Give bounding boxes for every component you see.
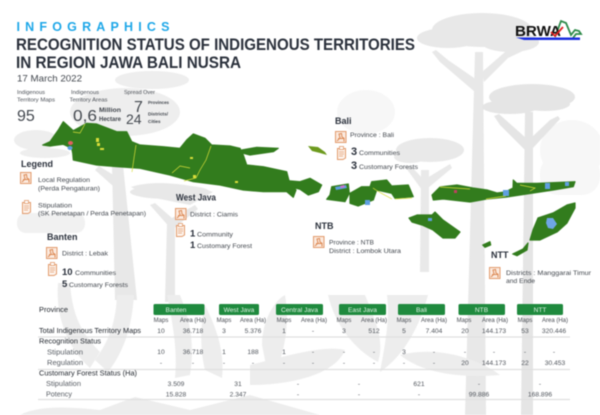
row: total maps: 3: [342, 328, 346, 335]
province names: NTB: [475, 307, 489, 314]
stat: spread: Cities: [148, 119, 161, 124]
legend: (Perda Pengaturan): [38, 186, 100, 192]
column headers: Maps: [217, 318, 231, 324]
top right tree: [417, 13, 539, 415]
row: total maps: 5: [402, 328, 406, 335]
row: recognition regulation: -: [160, 360, 162, 367]
title: [16, 36, 415, 72]
row labels: Regulation: [47, 360, 83, 367]
column headers: Maps: [397, 318, 411, 324]
stat: territory maps: [17, 90, 55, 125]
callout: NTT: [490, 250, 592, 285]
Bali island: [288, 178, 322, 195]
row labels: [39, 307, 142, 398]
row: forest stipulation: -: [297, 381, 299, 388]
row: forest stipulation: -: [478, 381, 480, 388]
callout: Banten: [46, 232, 129, 290]
callout: NTB: District : Lombok Utara: [329, 248, 401, 255]
stat: spread: 24: [126, 111, 142, 127]
legend: (SK Penetapan / Perda Penetapan): [38, 210, 146, 218]
callout: Bali: 3: [351, 160, 357, 172]
row labels: Potency: [46, 392, 73, 398]
icon: local regulation: [20, 172, 31, 184]
row labels: Recognition Status: [39, 338, 102, 346]
Lombok island: [327, 184, 349, 202]
callout: NTB: Province : NTB: [329, 240, 374, 246]
province names: Bali: [416, 307, 428, 314]
row: forest stipulation: -: [358, 381, 360, 388]
row: forest stipulation: 621: [413, 381, 425, 388]
row: forest potency: 168.896: [528, 392, 552, 398]
row: recognition stipulation: [157, 349, 555, 356]
row: recognition stipulation: -: [433, 349, 435, 356]
callout: Bali: Communities: [359, 150, 401, 157]
column headers: Maps: [154, 318, 168, 324]
stat: territory areas: 0,6: [73, 108, 97, 125]
Java island: [43, 122, 296, 197]
callout: West Java: Community: [197, 232, 234, 238]
stat: spread: 7: [134, 99, 143, 116]
row: total maps: 320.446: [542, 328, 566, 335]
row: recognition regulation: -: [192, 360, 194, 367]
stat: territory areas: Indigenous: [71, 90, 99, 96]
callout: NTT: Districts : Manggarai Timur: [506, 270, 592, 277]
stat: territory areas: [70, 90, 122, 125]
row: recognition stipulation: -: [373, 349, 375, 356]
legend tree crown: [17, 213, 85, 233]
bottom leaves: [20, 283, 500, 415]
column headers: Area (Ha): [240, 318, 266, 324]
callout: Banten: Customary Forests: [69, 282, 129, 289]
stat: territory areas: Territory Areas: [70, 98, 108, 104]
row: forest potency: -: [297, 392, 299, 398]
row: total maps: 36.718: [183, 328, 204, 335]
column headers: Area (Ha): [361, 318, 387, 324]
row: forest stipulation: 3.509: [168, 381, 185, 388]
stat: territory maps: 95: [17, 108, 35, 125]
province names: Central Java: [281, 307, 318, 314]
logo: BRWA: BRWA: [515, 24, 562, 40]
logo: BRWA: [515, 21, 581, 40]
row: recognition regulation: -: [343, 360, 345, 367]
row: recognition stipulation: -: [493, 349, 495, 356]
province names: Banten: [166, 307, 187, 314]
row: recognition stipulation: 1: [222, 349, 226, 356]
callout: Bali: [335, 116, 419, 172]
column headers: Area (Ha): [482, 318, 508, 324]
callout: NTB: NTB: [315, 221, 334, 231]
Sumba island: [409, 212, 460, 238]
callout: West Java: [176, 192, 252, 251]
callout: Banten: District : Lebak: [62, 250, 109, 258]
column headers: Area (Ha): [542, 318, 568, 324]
date: 17 March 2022: [17, 74, 82, 84]
faint clouds: [337, 90, 600, 195]
stat: spread: [124, 90, 169, 127]
row labels: Customary Forest Status (Ha): [39, 370, 137, 378]
row: recognition regulation: -: [252, 360, 254, 367]
legend: Local Regulation: [38, 177, 90, 184]
row: recognition stipulation: 10: [157, 349, 165, 356]
row: recognition regulation: 144.173: [482, 360, 506, 367]
row: recognition regulation: -: [312, 360, 314, 367]
province names: West Java: [224, 307, 255, 314]
row: forest potency: 15.828: [166, 392, 187, 398]
province names: East Java: [348, 307, 377, 314]
row separators: [38, 337, 570, 400]
row: total maps: 1: [282, 328, 286, 335]
row: total maps: 5.376: [245, 328, 262, 335]
table: recognition status by province: [38, 304, 570, 400]
row: recognition regulation: -: [403, 360, 405, 367]
row: recognition stipulation: -: [524, 349, 526, 356]
map: Java Bali Nusa Tenggara: [43, 122, 575, 256]
Timor island: [530, 203, 575, 240]
heading: INFOGRAPHICS: INFOGRAPHICS: [16, 20, 170, 34]
row: recognition stipulation: 188: [247, 349, 259, 356]
callout: NTT: NTT: [491, 250, 509, 260]
province names: [166, 307, 546, 314]
row: recognition regulation: [160, 360, 566, 367]
callout: West Java: 1: [190, 228, 196, 240]
province names: NTT: [534, 307, 546, 314]
callout: West Java: 1: [190, 240, 196, 251]
row labels: Province: [39, 307, 68, 314]
row: recognition stipulation: -: [553, 349, 555, 356]
column headers: [154, 318, 568, 324]
callout: West Java: District : Ciamis: [190, 212, 239, 218]
Flores island: [432, 180, 575, 202]
row: total maps: 7.404: [426, 328, 443, 335]
second right tree: [482, 84, 575, 415]
West Java tree: [130, 183, 213, 302]
row: forest potency: [166, 392, 552, 398]
row: recognition regulation: 22: [521, 360, 529, 367]
row: total maps: 53: [521, 328, 529, 335]
row: forest potency: -: [418, 392, 420, 398]
callout: Bali: Customary Forests: [359, 164, 419, 171]
Madura island: [242, 147, 278, 155]
callout: West Java: Customary Forest: [197, 243, 252, 250]
third tree: [394, 138, 464, 272]
row labels: Stipulation: [47, 350, 83, 356]
icon: stipulation: [22, 200, 30, 214]
row: recognition stipulation: -: [312, 349, 314, 356]
Sumbawa island: [350, 180, 413, 206]
row: recognition regulation: -: [283, 360, 285, 367]
callout: Bali: 3: [351, 146, 357, 158]
province pills: [154, 304, 563, 315]
row: recognition stipulation: 1: [282, 349, 286, 356]
title: IN REGION JAWA BALI NUSRA: [16, 54, 241, 72]
row: forest stipulation: [168, 381, 541, 388]
row: recognition regulation: -: [373, 360, 375, 367]
row: forest potency: -: [358, 392, 360, 398]
callout: Banten: Communities: [75, 270, 117, 277]
row: total maps: 10: [157, 328, 165, 335]
column headers: Maps: [518, 318, 532, 324]
callout: Banten: 10: [62, 267, 73, 278]
row: total maps: 144.173: [482, 328, 506, 335]
column headers: Area (Ha): [180, 318, 206, 324]
row: forest potency: 99.886: [469, 392, 490, 398]
callout: Bali: Bali: [335, 116, 352, 126]
column headers: Maps: [457, 318, 471, 324]
row: recognition regulation: -: [433, 360, 435, 367]
column headers: Maps: [337, 318, 351, 324]
legend: [20, 159, 146, 218]
legend: Stipulation: [38, 202, 72, 210]
row: total maps: 3: [222, 328, 226, 335]
stat: territory areas: Million: [99, 108, 121, 114]
callout: Banten: 5: [62, 279, 68, 290]
row: recognition stipulation: 3: [402, 349, 406, 356]
row: recognition stipulation: -: [464, 349, 466, 356]
left tree crown and trunk: [14, 71, 189, 158]
row: total maps: 20: [461, 328, 469, 335]
callout: NTB: [314, 221, 401, 255]
stat: spread: Districts/: [148, 112, 169, 116]
column headers: Area (Ha): [421, 318, 447, 324]
provincial borders and highlights: [73, 124, 211, 181]
column headers: Maps: [277, 318, 291, 324]
row: recognition regulation: -: [223, 360, 225, 367]
title: RECOGNITION STATUS OF INDIGENOUS TERRITORIES: [16, 36, 415, 54]
callout: Banten: Banten: [47, 232, 78, 242]
stat: territory maps: Territory Maps: [17, 98, 55, 104]
stat: spread: Spread Over: [124, 90, 155, 96]
callout: NTT: and Ende: [506, 278, 535, 285]
callout: Bali: Province : Bali: [350, 132, 394, 139]
row: recognition regulation: 20: [461, 360, 469, 367]
row: forest stipulation: -: [539, 381, 541, 388]
row: recognition stipulation: -: [343, 349, 345, 356]
row labels: Total Indigenous Territory Maps: [39, 328, 142, 335]
row labels: Stipulation: [46, 381, 81, 388]
column headers: Area (Ha): [301, 318, 327, 324]
callout: West Java: West Java: [176, 192, 217, 202]
stat: territory areas: Hectare: [99, 117, 122, 123]
Nusa Penida islet: [308, 146, 327, 155]
row: forest potency: 2.347: [230, 392, 247, 398]
stat: territory maps: Indigenous: [17, 90, 45, 96]
stat: spread: Provinces: [148, 100, 169, 105]
row: forest stipulation: 31: [234, 381, 242, 388]
legend: Legend: [21, 159, 53, 169]
row: total maps: 512: [368, 328, 380, 335]
row: recognition regulation: 30.453: [545, 360, 566, 367]
row: total maps: -: [312, 328, 314, 335]
row: recognition stipulation: 36.718: [183, 349, 204, 356]
row: total maps: [157, 328, 566, 335]
